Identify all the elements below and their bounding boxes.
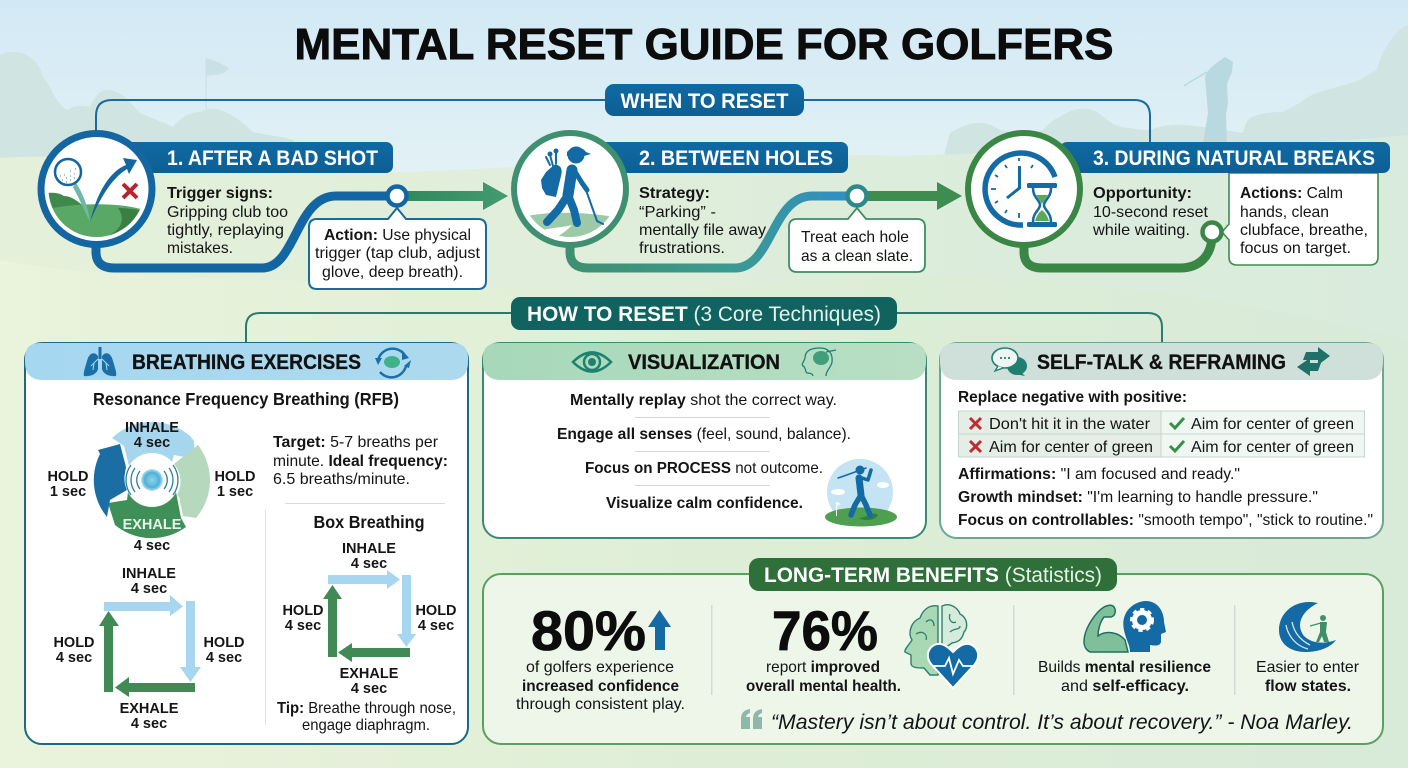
stat: flow states: Easier to enter [1256,659,1360,676]
callout: actions: Actions: Calm [1240,185,1343,202]
chart: box breathing left: EXHALE [120,701,179,717]
callout: action: trigger (tap club, adjust [315,245,481,262]
chart: box breathing left: 4 sec [131,581,167,597]
heading: long-term benefits [749,558,1117,591]
node 1 [388,186,406,206]
icon: swap arrows [1297,347,1330,376]
stat: 80 percent: increased confidence [522,678,679,695]
table: negative to positive [958,411,1365,457]
title: MENTAL RESET GUIDE FOR GOLFERS [294,20,1114,69]
text: strategy [639,185,766,257]
panel header: breathing: BREATHING EXERCISES [132,351,361,374]
heading: when to reset: WHEN TO RESET [620,90,789,113]
text: RFB target: Target: 5-7 breaths per [273,434,439,451]
text: opportunity: Opportunity: [1093,185,1192,202]
panel header: visualization [483,343,926,380]
stat: 76 percent [746,599,901,695]
text: breathing tip: Tip: Breathe through nose, [277,700,456,717]
node 2 [848,186,866,206]
stat: 80 percent [516,599,685,713]
table: negative to positive: Don't hit it in the water [989,416,1151,433]
callout: actions [1222,173,1378,265]
stat: mental resilience: and self-efficacy. [1061,678,1189,695]
connector path 2 [570,196,857,268]
text: breathing tip [277,700,456,734]
icon: eye [573,352,611,372]
callout: actions: hands, clean [1240,204,1329,221]
decorative flag silhouette [206,58,229,110]
section connector: when to reset [96,100,1150,143]
text: strategy: Strategy: [639,185,710,202]
panel: breathing exercises [25,343,468,744]
stat: 76 percent: overall mental health. [746,678,901,695]
text: trigger signs: mistakes. [167,240,233,257]
chart: box breathing right: HOLD [282,603,324,619]
panel header: self-talk: SELF-TALK & REFRAMING [1037,351,1286,374]
chart: RFB breathing ring: 4 sec [134,435,170,451]
chart: box breathing right: EXHALE [340,666,399,682]
icon: golf ball and arrow [38,130,156,248]
text: affirmations [958,466,1373,529]
text: RFB target [273,434,448,488]
connector path 1 [96,196,397,268]
step 2: between holes [511,130,962,272]
text: trigger signs [167,185,288,257]
text: strategy: mentally file away [639,222,766,239]
panel: self-talk and reframing [940,343,1383,538]
panel: visualization [483,343,926,538]
text: visualization tips [557,392,851,512]
panel: long-term benefits [483,558,1383,744]
chart: box breathing right: 4 sec [418,618,454,634]
heading: how to reset [511,297,897,330]
text: opportunity: while waiting. [1092,222,1190,239]
text: affirmations: Affirmations: "I am focused and ready." [958,466,1240,483]
quote: “Mastery isn’t about control. It’s about recovery.” - Noa Marley. [771,710,1353,734]
icon: wave with golfer [1279,602,1336,652]
chart: box breathing left: HOLD [53,635,95,651]
icon: muscle arm and gear head [1084,601,1166,652]
icon: lungs [84,347,116,376]
header bar 2: 2. BETWEEN HOLES [639,147,833,170]
chart: box breathing right: 4 sec [351,556,387,572]
callout: action: Action: Use physical [324,227,471,244]
text: trigger signs: Gripping club too [167,204,288,221]
text: breathing tip: engage diaphragm. [302,717,430,734]
chart: box breathing left: 4 sec [131,716,167,732]
step 3: during natural breaks [965,130,1390,268]
chart: box breathing right: 4 sec [351,681,387,697]
text: affirmations: Focus on controllables: "smooth tempo", "stick to routine." [958,512,1373,529]
chart: RFB breathing ring: 4 sec [134,538,170,554]
stat: 76 percent: report improved [766,659,880,676]
text: trigger signs: tightly, replaying [167,222,284,239]
stat: mental resilience: Builds mental resilience [1038,659,1211,676]
heading: how to reset: HOW TO RESET (3 Core Techniques) [527,303,881,326]
stat: 76 percent: 76% [772,599,878,662]
chart: RFB breathing ring: INHALE [125,420,179,436]
chart: RFB breathing ring: 1 sec [217,484,253,500]
chart: box breathing left: INHALE [122,566,176,582]
header bar 1: 1. AFTER A BAD SHOT [167,147,378,170]
icon: up arrow [648,610,671,650]
callout: actions: focus on target. [1240,240,1351,257]
panel header: breathing [25,343,468,380]
chart: box breathing left: HOLD [203,635,245,651]
chart: RFB breathing ring: 1 sec [50,484,86,500]
table: negative to positive: Aim for center of green [1191,439,1354,456]
chart: RFB breathing ring: HOLD [214,469,256,485]
section connector: how to reset [246,313,1162,343]
stat: flow states [1256,602,1360,695]
text: affirmations: Growth mindset: "I'm learning to handle pressure." [958,489,1318,506]
text: opportunity [1092,185,1209,239]
chart: RFB breathing ring: EXHALE [123,517,182,533]
header bar 3 [1060,142,1390,173]
icon: brain and heart [905,605,978,688]
header bar 2 [600,142,848,173]
node 3 [1202,222,1222,242]
chart: box breathing right: 4 sec [285,618,321,634]
callout: clean slate [789,208,925,272]
text: visualization tips: Visualize calm confidence. [606,495,803,512]
arrow 1 [405,182,508,210]
text: replace negative: Replace negative with positive: [958,389,1187,406]
stat: 80 percent: of golfers experience [526,659,674,676]
stat: mental resilience [1038,601,1211,695]
chart: box breathing right: HOLD [415,603,457,619]
icon: head with brain [802,348,836,376]
table: negative to positive: Aim for center of green [989,439,1153,456]
arrow 2 [866,182,962,210]
stat: 80 percent: 80% [531,599,646,662]
stat: flow states: flow states. [1265,678,1351,695]
text: opportunity: 10-second reset [1093,204,1209,221]
header bar 3: 3. DURING NATURAL BREAKS [1093,147,1375,170]
heading: long-term benefits: LONG-TERM BENEFITS (Statistics) [764,564,1102,587]
panel header: visualization: VISUALIZATION [628,351,780,374]
chart: box breathing right [282,541,457,697]
stat: 80 percent: through consistent play. [516,696,685,713]
text: trigger signs: Trigger signs: [167,185,273,202]
subheading: RFB: Resonance Frequency Breathing (RFB) [93,389,399,409]
text: strategy: “Parking” - [639,204,716,221]
icon: golfer on green [825,459,897,526]
panel header: self-talk [940,343,1383,380]
subheading: box breathing: Box Breathing [314,512,424,532]
connector path 3 [1024,235,1212,268]
icon: cycle [375,349,411,377]
text: RFB target: 6.5 breaths/minute. [273,471,410,488]
text: visualization tips: Mentally replay shot the correct way. [570,392,837,409]
chart: box breathing left: 4 sec [206,650,242,666]
icon: speech bubbles [992,348,1027,376]
chart: box breathing right: INHALE [342,541,396,557]
text: visualization tips: Focus on PROCESS not outcome. [585,460,823,477]
chart: RFB breathing ring: HOLD [47,469,89,485]
text: visualization tips: Engage all senses (feel, sound, balance). [557,426,851,443]
table: negative to positive: Aim for center of green [1191,416,1354,433]
chart: box breathing left: 4 sec [56,650,92,666]
callout: actions: clubface, breathe, [1240,222,1368,239]
callout: action [309,208,486,289]
heading: when to reset [605,84,804,116]
chart: RFB breathing ring [47,420,256,554]
icon: quotation mark [741,709,762,729]
callout: clean slate: Treat each hole [801,229,909,246]
text: strategy: frustrations. [639,240,725,257]
step 1: after a bad shot [38,130,508,289]
icon: golfer walking with bag [511,130,629,248]
header bar 1 [126,142,393,173]
callout: clean slate: as a clean slate. [801,248,913,265]
icon: clock and hourglass [965,130,1083,248]
callout: action: glove, deep breath). [322,264,463,281]
text: RFB target: minute. Ideal frequency: [273,453,448,470]
decorative golfer silhouette [1184,57,1233,143]
chart: box breathing left [53,566,245,732]
